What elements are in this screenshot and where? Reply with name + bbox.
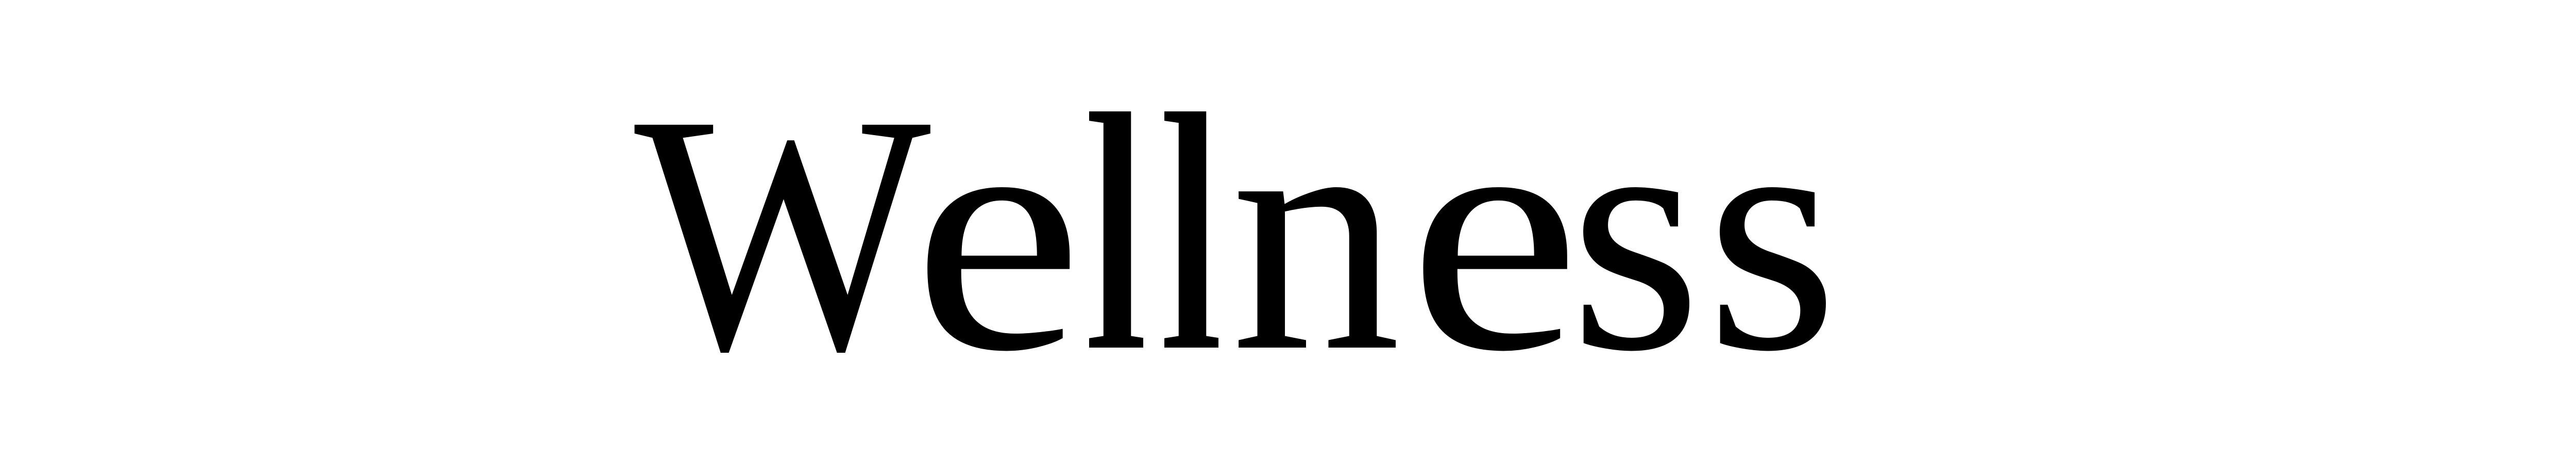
title: Wellness: e — [912, 44, 1083, 421]
title: Wellness: s — [1706, 44, 1838, 421]
title: Wellness: e — [1408, 44, 1581, 421]
title: Wellness: l — [1145, 44, 1240, 421]
title: Wellness — [635, 111, 1826, 353]
title: Wellness: W — [634, 44, 934, 421]
title: Wellness: s — [1569, 44, 1702, 421]
title: Wellness: l — [1070, 44, 1164, 421]
title: Wellness: n — [1231, 44, 1401, 421]
